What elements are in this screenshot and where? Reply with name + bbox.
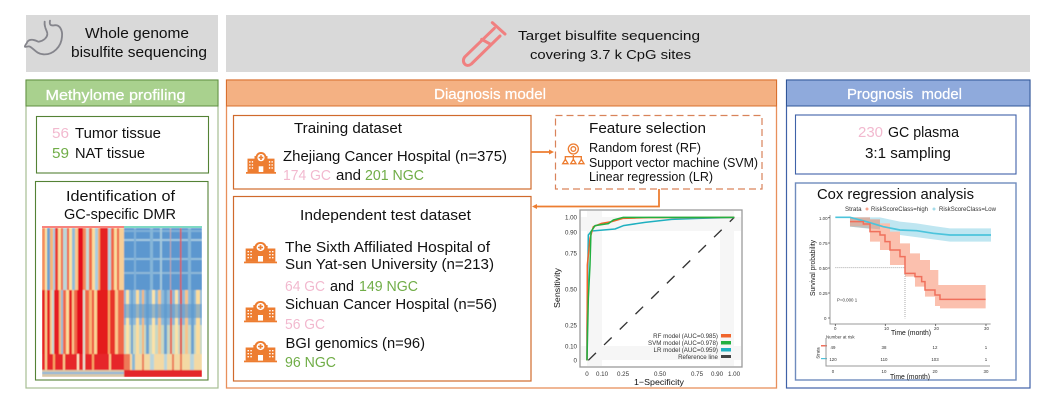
legend: risk strata: [845, 206, 997, 213]
DMR identification box: GC-specific DMR: [64, 207, 176, 223]
independent test dataset box: Independent test dataset: [300, 208, 471, 224]
training dataset box: Zhejiang Cancer Hospital (n=375): [283, 149, 507, 165]
text: target bisulfite sequencing covering 3.7 k CpG sites: Target bisulfite sequencing: [518, 28, 700, 43]
training dataset box: [234, 116, 531, 189]
text: whole genome bisulfite sequencing: bisulfite sequencing: [71, 45, 207, 61]
icon: hospital: [246, 152, 276, 174]
independent test dataset box: 149 NGC: [359, 279, 418, 295]
training dataset box: 174 GC: [283, 168, 331, 184]
y axis labels: 1.00: [565, 214, 578, 222]
legend: risk strata: RiskScoreClass=Low: [939, 206, 997, 213]
table: number at risk: Number at risk: [826, 334, 855, 340]
chart: survival curves: 0: [824, 316, 827, 321]
chart: survival curves: 20: [934, 326, 939, 331]
training dataset box: and: [336, 168, 361, 184]
x axis labels: 1.00: [728, 371, 741, 378]
heading: prognosis model: [786, 80, 1030, 106]
icon: hospital: [244, 341, 277, 362]
curves: [587, 217, 734, 360]
DMR identification box: [36, 182, 208, 380]
legend: SVM model (AUC=0.978): [648, 340, 718, 347]
icon: stomach: [25, 21, 62, 54]
table: number at risk: 110: [880, 357, 888, 362]
cox regression box: Cox regression analysis: [817, 187, 974, 203]
training dataset box: Training dataset: [294, 121, 402, 137]
legend: [648, 333, 731, 361]
table: number at risk: 20: [933, 369, 938, 374]
table: number at risk: 120: [829, 357, 837, 362]
axis titles: Sensitivity: [552, 267, 562, 308]
x axis labels: [585, 371, 741, 378]
x axis labels: 0: [585, 371, 589, 378]
y axis labels: 0.90: [565, 230, 578, 236]
feature selection box: Support vector machine (SVM): [589, 155, 758, 170]
chart: survival curves: [810, 215, 991, 337]
y axis labels: 0.25: [565, 322, 578, 330]
chart: survival curves: 0.75: [819, 241, 828, 246]
chart: survival curves: 0.25: [819, 291, 828, 296]
chart: survival curves: 0: [834, 326, 837, 331]
sample counts box: 59: [52, 146, 69, 162]
heading: diagnosis model: [226, 80, 776, 106]
chart: survival curves: 10: [884, 326, 889, 331]
feature selection box: [556, 116, 762, 189]
axis titles: 1−Specificity: [634, 377, 685, 387]
legend: risk strata: RiskScoreClass=high: [871, 206, 929, 213]
icon: decision network: [563, 144, 584, 164]
feature selection box: Random forest (RF): [589, 140, 701, 155]
chart: survival curves: 30: [984, 326, 989, 331]
table: number at risk: Strata: [816, 347, 820, 359]
independent test dataset box: The Sixth Affiliated Hospital of: [285, 240, 491, 256]
table: number at risk: 0: [832, 369, 835, 374]
legend: LR model (AUC=0.959): [654, 347, 718, 354]
y axis labels: 0.75: [565, 250, 578, 258]
x axis labels: 0.75: [691, 371, 704, 378]
plasma sampling box: 230: [858, 125, 883, 141]
text: target bisulfite sequencing covering 3.7 k CpG sites: covering 3.7 k CpG sites: [530, 47, 691, 62]
chart: survival curves: Time (month): [891, 330, 931, 337]
table: number at risk: [816, 334, 990, 381]
independent test dataset box: and: [330, 279, 354, 295]
sample counts box: Tumor tissue: [75, 126, 161, 142]
table: number at risk: Time (month): [890, 374, 930, 381]
y axis labels: 0: [574, 358, 578, 364]
legend: RF model (AUC=0.985): [653, 333, 718, 340]
x axis labels: 0.50: [654, 371, 667, 378]
y axis labels: [565, 214, 578, 364]
x axis labels: 0.90: [711, 371, 724, 378]
sample counts box: 56: [52, 126, 69, 142]
table: number at risk: 103: [931, 357, 939, 362]
plasma sampling box: GC plasma: [888, 125, 959, 141]
heading: diagnosis model: Diagnosis model: [434, 87, 546, 103]
arrow: training to feature selection: [531, 150, 554, 154]
chart: survival curves: Survival probability: [810, 240, 817, 296]
panel: diagnosis model: [226, 80, 776, 388]
feature selection box: Feature selection: [589, 121, 706, 137]
icon: hospital: [244, 301, 277, 322]
icon: test tube: [463, 23, 505, 65]
plasma sampling box: 3:1 sampling: [865, 146, 951, 162]
heading: methylome profiling: [26, 80, 218, 106]
independent test dataset box: BGI genomics (n=96): [286, 336, 425, 352]
table: number at risk: 49: [831, 345, 836, 350]
text: whole genome bisulfite sequencing: Whole genome: [85, 26, 189, 42]
heading: prognosis model: Prognosis model: [847, 87, 962, 103]
independent test dataset box: 56 GC: [285, 317, 325, 333]
cox regression box: [796, 183, 1016, 381]
independent test dataset box: 96 NGC: [285, 355, 336, 371]
independent test dataset box: Sun Yat-sen University (n=213): [285, 257, 494, 273]
panel: target bisulfite sequencing banner: [226, 15, 1030, 72]
chart: survival curves: 0.50: [819, 266, 828, 271]
legend: Reference line: [678, 354, 719, 361]
sample counts box: [36, 116, 208, 173]
chart: survival curves: 1.00: [819, 216, 828, 221]
training dataset box: 201 NGC: [365, 168, 424, 184]
independent test dataset box: Sichuan Cancer Hospital (n=56): [285, 297, 497, 313]
panel: methylome profiling: [26, 80, 218, 388]
legend: risk strata: Strata: [845, 206, 862, 213]
sample counts box: NAT tissue: [75, 146, 145, 162]
chart: ROC curves: [552, 210, 742, 387]
panel: prognosis model: [786, 80, 1030, 388]
chart: survival curves: P=0.000 1: [837, 298, 858, 302]
table: number at risk: 38: [882, 345, 887, 350]
DMR identification box: Identification of: [66, 189, 176, 205]
independent test dataset box: 64 GC: [285, 279, 325, 295]
plasma sampling box: [796, 115, 1016, 174]
icon: hospital: [244, 242, 277, 263]
table: number at risk: 12: [933, 345, 938, 350]
x axis labels: 0.25: [617, 371, 630, 378]
table: number at risk: 1: [985, 357, 988, 362]
heading: methylome profiling: Methylome profiling: [46, 88, 186, 104]
y axis labels: 0.50: [565, 286, 578, 294]
arrow: feature selection to independent test dataset: [532, 189, 659, 209]
independent test dataset box: [234, 196, 531, 381]
table: number at risk: 1: [985, 345, 988, 350]
panel: whole genome bisulfite sequencing banner: [25, 15, 218, 72]
table: number at risk: 30: [984, 369, 989, 374]
table: number at risk: 10: [882, 369, 887, 374]
heatmap: [42, 226, 202, 377]
y axis labels: 0.10: [565, 344, 578, 350]
axis titles: [552, 267, 685, 387]
x axis labels: 0.10: [596, 371, 609, 378]
feature selection box: Linear regression (LR): [589, 169, 713, 184]
